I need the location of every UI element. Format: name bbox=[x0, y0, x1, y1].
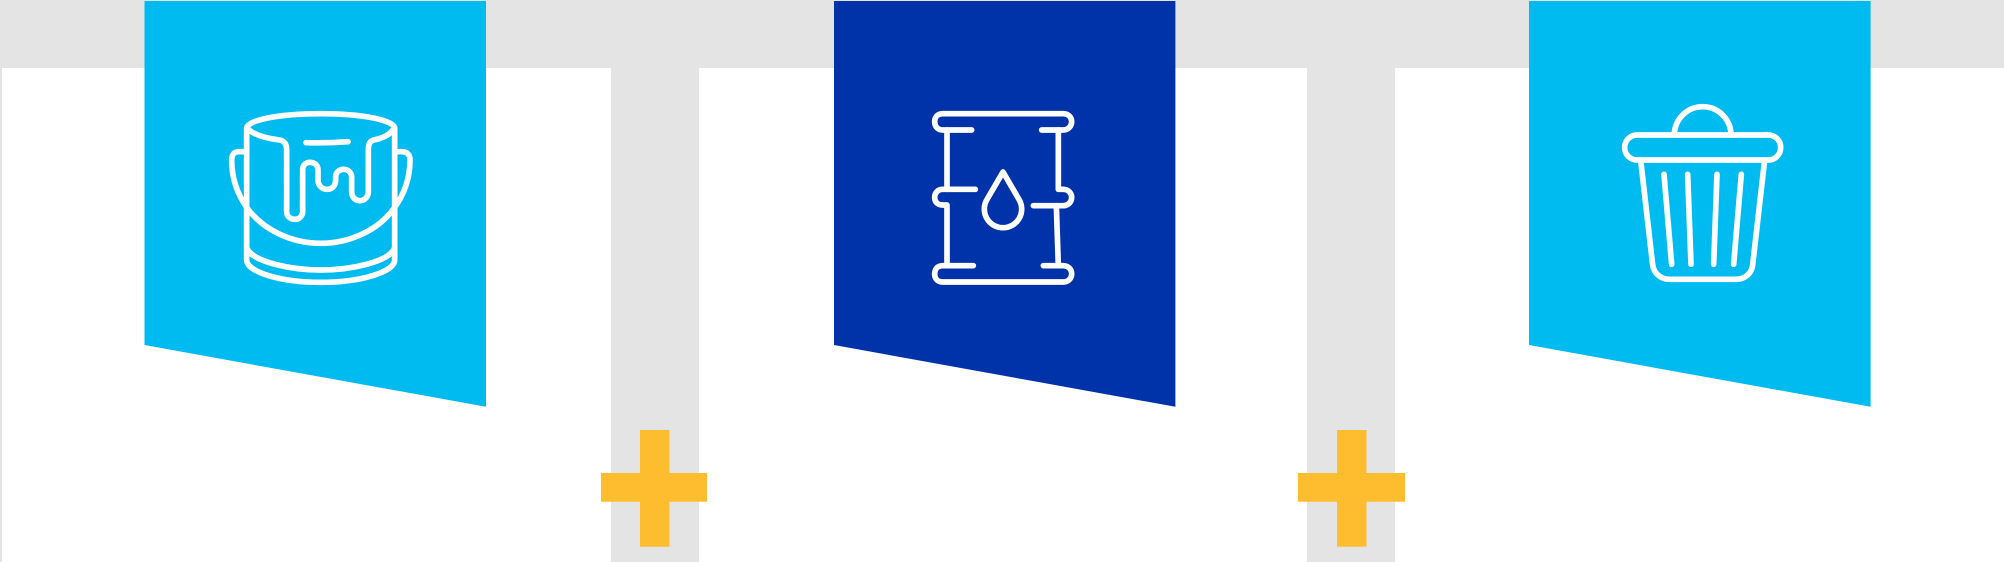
icon: trash can bbox=[1625, 107, 1781, 279]
panel: left white column bbox=[2, 68, 611, 562]
icon: paint can bbox=[232, 114, 410, 282]
banner: left cyan bbox=[144, 1, 486, 407]
icon: yellow plus left bbox=[601, 430, 707, 547]
banner: middle navy bbox=[834, 1, 1175, 407]
icon: oil barrel bbox=[935, 114, 1072, 282]
panel: middle white column bbox=[699, 68, 1307, 562]
panel: right white column bbox=[1395, 68, 2004, 562]
banner: right cyan bbox=[1529, 1, 1871, 407]
icon: yellow plus right bbox=[1298, 430, 1405, 547]
